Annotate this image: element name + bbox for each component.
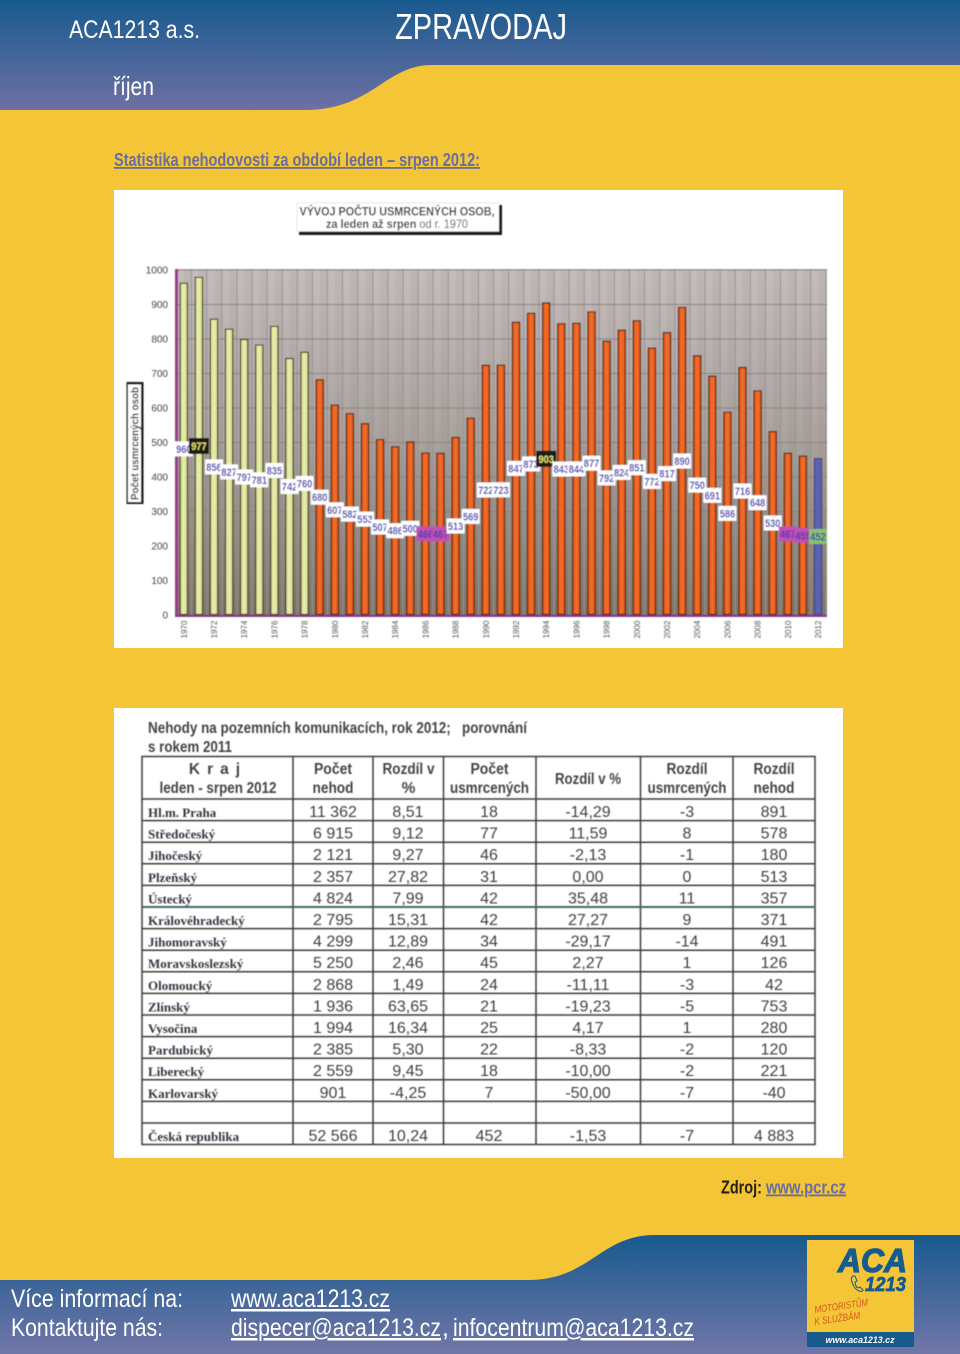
x-axis years: 1970 xyxy=(180,620,189,638)
logo: ACA 1213: 1213 xyxy=(865,1274,906,1296)
row: Středočeský: 77 xyxy=(480,826,498,843)
row: Královéhradecký: Královéhradecký xyxy=(148,913,245,928)
bar value labels: 760 xyxy=(297,479,313,491)
row: Olomoucký: -11,11 xyxy=(566,977,610,994)
row: Liberecký: 221 xyxy=(761,1063,787,1080)
row: Středočeský: 8 xyxy=(683,826,692,843)
bar value labels: 553 xyxy=(357,514,373,526)
row: Jihomoravský: Jihomoravský xyxy=(148,935,227,950)
bar value labels: 844 xyxy=(569,464,584,476)
x-axis years: 1984 xyxy=(391,620,400,638)
x-axis years: 1990 xyxy=(482,620,491,638)
row: Olomoucký: 1,49 xyxy=(392,977,424,994)
bar value labels: 468 xyxy=(418,529,433,541)
x-axis years: 2008 xyxy=(754,620,763,638)
row: Jihomoravský: 491 xyxy=(761,934,787,951)
x-axis years: 2010 xyxy=(784,620,793,638)
bar value labels: 530 xyxy=(765,518,781,530)
table grid xyxy=(142,756,815,1144)
row: Plzeňský xyxy=(148,869,787,886)
row: Česká republika total: -1,53 xyxy=(570,1128,606,1145)
row: Středočeský: 9,12 xyxy=(392,826,424,843)
table header row: Kraj xyxy=(189,761,247,778)
bar value labels: 851 xyxy=(629,463,645,475)
source credit: Zdroj: xyxy=(721,1178,762,1198)
y-axis scale: 300 xyxy=(151,507,168,518)
bar value labels: 873 xyxy=(523,459,539,471)
x-axis years: 1982 xyxy=(361,620,370,638)
row: Ústecký: 7,99 xyxy=(392,890,424,907)
row: Hl.m. Praha: -3 xyxy=(680,804,694,821)
row: Liberecký: Liberecký xyxy=(148,1064,205,1079)
chart title box xyxy=(297,203,502,235)
row: Karlovarský: 901 xyxy=(320,1085,346,1102)
row: Olomoucký: Olomoucký xyxy=(148,978,213,993)
plot area xyxy=(175,269,827,617)
row: Ústecký: 42 xyxy=(480,890,498,907)
row: Vysočina: 25 xyxy=(480,1020,498,1037)
row: Středočeský: 6 915 xyxy=(313,826,353,843)
row: Liberecký xyxy=(148,1063,787,1080)
x-axis years: 1998 xyxy=(603,620,612,638)
y-axis title box xyxy=(126,382,144,504)
row: Pardubický: 120 xyxy=(761,1042,787,1059)
row: Zlínský: 21 xyxy=(480,998,498,1015)
row: Jihočeský: Jihočeský xyxy=(148,848,203,863)
bar value labels: 742 xyxy=(282,482,298,494)
bar value labels: 723 xyxy=(493,485,509,497)
table title: Nehody na pozemních komunikacích, rok 2012; porovnání xyxy=(148,720,527,737)
table header row: Počet xyxy=(314,761,352,778)
row: Hl.m. Praha xyxy=(148,804,787,821)
row: Jihočeský: 2 121 xyxy=(313,847,353,864)
bar value labels: 586 xyxy=(720,509,735,521)
row: Jihočeský: 9,27 xyxy=(392,847,424,864)
row: Zlínský: -19,23 xyxy=(565,998,611,1015)
contact labels: Kontaktujte nás: xyxy=(11,1314,163,1342)
row: Středočeský xyxy=(148,826,787,843)
row: Olomoucký: 2 868 xyxy=(313,977,353,994)
bar value labels: 827 xyxy=(221,467,237,479)
row: Plzeňský: 0 xyxy=(683,869,692,886)
row: Jihočeský xyxy=(148,847,787,864)
logo: ACA 1213: ACA xyxy=(837,1242,907,1279)
row: Olomoucký: 42 xyxy=(765,977,783,994)
row: Zlínský: 753 xyxy=(761,998,787,1015)
table header row: Počet xyxy=(470,761,508,778)
row: Vysočina xyxy=(148,1020,787,1037)
table header row: usmrcených xyxy=(450,780,529,797)
row: Hl.m. Praha: 11 362 xyxy=(309,804,357,821)
bar value labels: 648 xyxy=(750,498,766,510)
x-axis years: 1992 xyxy=(512,620,521,638)
row: Ústecký: 4 824 xyxy=(313,890,353,907)
x-axis years: 2012 xyxy=(814,620,823,638)
row: Jihomoravský: 4 299 xyxy=(313,934,353,951)
contact links: www.aca1213.cz xyxy=(230,1285,390,1313)
row: Karlovarský: -50,00 xyxy=(565,1085,611,1102)
row: Pardubický: -2 xyxy=(680,1042,694,1059)
x-axis years: 1978 xyxy=(301,620,310,638)
row: Královéhradecký: 15,31 xyxy=(388,912,428,929)
table header row: Rozdíl v xyxy=(382,761,435,778)
row: Jihomoravský: 12,89 xyxy=(388,934,428,951)
row: Česká republika total: Česká republika xyxy=(148,1129,240,1144)
x-axis years: 1980 xyxy=(331,620,340,638)
x-axis years: 1976 xyxy=(270,620,279,638)
row: Královéhradecký xyxy=(148,912,787,929)
x-axis years xyxy=(180,620,823,638)
row: Moravskoslezský: 2,46 xyxy=(392,955,424,972)
row: Plzeňský: 2 357 xyxy=(313,869,353,886)
x-axis years: 1996 xyxy=(572,620,581,638)
month: říjen xyxy=(113,71,154,101)
y-axis scale: 900 xyxy=(151,300,168,311)
bar value labels: 607 xyxy=(327,505,343,517)
logo: ACA 1213: K SLUŽBÁM xyxy=(814,1309,862,1328)
row: Zlínský: 63,65 xyxy=(388,998,428,1015)
bar value labels: 467 xyxy=(780,529,796,541)
bar value labels: 843 xyxy=(554,464,569,476)
y-axis scale: 800 xyxy=(151,334,168,346)
y-axis scale xyxy=(146,266,168,622)
row: Plzeňský: 27,82 xyxy=(388,869,428,886)
row: Moravskoslezský: 2,27 xyxy=(572,955,604,972)
y-axis title box: Počet usmrcených osob xyxy=(130,387,142,500)
row: Jihomoravský: -29,17 xyxy=(565,934,611,951)
x-axis years: 2000 xyxy=(633,620,642,638)
row: Jihočeský: 180 xyxy=(761,847,787,864)
bar value labels: 797 xyxy=(237,472,252,484)
y-axis scale: 0 xyxy=(162,610,168,622)
row: Ústecký: 357 xyxy=(761,890,787,907)
bar value labels: 722 xyxy=(478,485,494,497)
row: Vysočina: 1 xyxy=(683,1020,692,1037)
row: Jihočeský: 46 xyxy=(480,847,498,864)
row: Zlínský: -5 xyxy=(680,998,694,1015)
row: Karlovarský: -4,25 xyxy=(390,1085,426,1102)
row: Karlovarský xyxy=(148,1085,786,1102)
row: Pardubický: Pardubický xyxy=(148,1043,214,1058)
row: Ústecký: 11 xyxy=(679,890,695,907)
row: Plzeňský: 31 xyxy=(480,869,498,886)
row: Královéhradecký: 42 xyxy=(480,912,498,929)
row: Pardubický: 5,30 xyxy=(392,1042,424,1059)
table header row: Rozdíl v % xyxy=(555,771,621,788)
bar value labels: 835 xyxy=(267,466,282,478)
logo: ACA 1213 xyxy=(807,1240,914,1347)
row: Ústecký: Ústecký xyxy=(148,891,193,906)
bar value labels: 486 xyxy=(388,526,403,538)
table header row xyxy=(160,761,794,797)
contact labels xyxy=(11,1285,183,1342)
bar value labels: 459 xyxy=(795,531,811,543)
contact links: , xyxy=(442,1314,449,1342)
row: Česká republika total xyxy=(148,1128,794,1145)
row: Hl.m. Praha: 8,51 xyxy=(392,804,424,821)
x-axis years: 1994 xyxy=(542,620,551,638)
table header row: Rozdíl xyxy=(666,761,708,778)
bar value labels: 977 xyxy=(191,441,207,453)
table header row: Rozdíl xyxy=(754,761,794,778)
organisation name: ACA1213 a.s. xyxy=(69,16,200,44)
bar value labels: 750 xyxy=(690,480,705,492)
row: Hl.m. Praha: 18 xyxy=(480,804,498,821)
table header row: leden - srpen 2012 xyxy=(160,780,276,797)
y-axis scale: 400 xyxy=(151,472,168,484)
x-axis years: 2004 xyxy=(693,620,702,638)
bars 1970-2012 xyxy=(180,277,822,614)
icon: phone xyxy=(851,1276,863,1291)
y-axis scale: 100 xyxy=(151,576,168,587)
row: Olomoucký: -3 xyxy=(680,977,694,994)
row: Karlovarský: Karlovarský xyxy=(148,1086,219,1101)
bar value labels: 467 xyxy=(433,529,449,541)
bar value labels: 877 xyxy=(584,459,600,470)
logo: ACA 1213: MOTORISTŮM xyxy=(813,1295,869,1316)
y-axis scale: 600 xyxy=(151,404,168,414)
y-axis scale: 700 xyxy=(151,369,168,380)
row: Středočeský: 578 xyxy=(761,826,787,843)
bar value labels: 691 xyxy=(705,491,720,503)
bar value labels: 824 xyxy=(614,468,630,480)
contact links: infocentrum@aca1213.cz xyxy=(453,1314,694,1342)
table header row: nehod xyxy=(312,780,354,797)
bar value labels: 507 xyxy=(372,522,388,534)
row: Zlínský: Zlínský xyxy=(148,999,190,1014)
bar value labels: 890 xyxy=(674,456,690,468)
bar value labels: 582 xyxy=(342,509,358,521)
bar value labels: 569 xyxy=(463,512,479,524)
row: Pardubický: 2 385 xyxy=(313,1042,353,1059)
panel: accidents table xyxy=(114,708,843,1158)
row: Liberecký: 2 559 xyxy=(313,1063,353,1080)
y-axis scale: 200 xyxy=(151,542,168,552)
row: Česká republika total: 52 566 xyxy=(309,1128,358,1145)
row: Liberecký: 18 xyxy=(480,1063,498,1080)
row: Pardubický: 22 xyxy=(480,1042,498,1059)
row: Plzeňský: Plzeňský xyxy=(148,870,198,885)
chart title box: VÝVOJ POČTU USMRCENÝCH OSOB, xyxy=(300,204,494,218)
newsletter title: ZPRAVODAJ xyxy=(395,6,567,47)
row: Vysočina: 16,34 xyxy=(388,1020,428,1037)
row: Vysočina: 4,17 xyxy=(572,1020,604,1037)
row: Pardubický xyxy=(148,1042,787,1059)
table title: s rokem 2011 xyxy=(148,739,232,756)
contact links xyxy=(230,1285,694,1342)
section heading: Statistika nehodovosti za období leden – srpen 2012: xyxy=(114,150,480,170)
row: Moravskoslezský: 126 xyxy=(761,955,787,972)
row: Jihomoravský: 34 xyxy=(480,934,498,951)
row: Vysočina: 280 xyxy=(761,1020,787,1037)
x-axis years: 1974 xyxy=(240,620,249,638)
table header row: % xyxy=(402,780,416,797)
bar value labels: 781 xyxy=(252,475,267,487)
bar value labels: 716 xyxy=(735,486,751,498)
x-axis years: 1986 xyxy=(421,620,430,638)
bar value labels: 772 xyxy=(644,477,660,489)
bar value labels: 960 xyxy=(176,444,192,456)
row: Česká republika total: -7 xyxy=(680,1128,694,1145)
bar value labels: 792 xyxy=(599,473,615,485)
row: Zlínský xyxy=(148,998,787,1015)
row: Vysočina: 1 994 xyxy=(313,1020,353,1037)
row: Česká republika total: 4 883 xyxy=(754,1128,794,1145)
bar value labels: 513 xyxy=(448,521,464,533)
row: Hl.m. Praha: 891 xyxy=(761,804,787,821)
row: Olomoucký xyxy=(148,977,783,994)
row: Jihomoravský xyxy=(148,934,787,951)
bar value labels: 452 xyxy=(810,532,826,544)
row: Česká republika total: 10,24 xyxy=(388,1128,428,1145)
table header row: usmrcených xyxy=(648,780,726,797)
chart title box: za leden až srpen od r. 1970 xyxy=(326,217,468,231)
row: Královéhradecký: 27,27 xyxy=(568,912,608,929)
bar value labels: 903 xyxy=(539,454,554,466)
row: Ústecký: 35,48 xyxy=(568,890,608,907)
x-axis years: 2002 xyxy=(663,620,672,638)
row: Olomoucký: 24 xyxy=(480,977,498,994)
row: Moravskoslezský: 5 250 xyxy=(313,955,353,972)
row: Moravskoslezský: 45 xyxy=(480,955,498,972)
row: Pardubický: -8,33 xyxy=(570,1042,606,1059)
row: Moravskoslezský: Moravskoslezský xyxy=(148,956,244,971)
table title xyxy=(148,720,527,756)
x-axis years: 2006 xyxy=(723,620,732,638)
x-axis years: 1972 xyxy=(210,620,219,638)
row: Jihočeský: -2,13 xyxy=(570,847,606,864)
source credit xyxy=(721,1178,846,1198)
row: Moravskoslezský xyxy=(148,955,787,972)
row: Karlovarský: -7 xyxy=(680,1085,694,1102)
row: Hl.m. Praha: Hl.m. Praha xyxy=(148,805,217,820)
bar value labels: 817 xyxy=(659,469,675,481)
row: Liberecký: 9,45 xyxy=(392,1063,424,1080)
row: Středočeský: Středočeský xyxy=(148,827,216,842)
row: Liberecký: -2 xyxy=(680,1063,694,1080)
row: Královéhradecký: 9 xyxy=(683,912,692,929)
table header row: nehod xyxy=(754,780,794,797)
row: Zlínský: 1 936 xyxy=(313,998,353,1015)
panel: fatalities bar chart xyxy=(114,190,843,648)
row: Plzeňský: 513 xyxy=(761,869,787,886)
row: Liberecký: -10,00 xyxy=(565,1063,611,1080)
row: Vysočina: Vysočina xyxy=(148,1021,198,1036)
y-axis scale: 1000 xyxy=(146,266,168,276)
contact links: dispecer@aca1213.cz xyxy=(231,1314,441,1342)
bar value labels: 500 xyxy=(403,524,418,536)
footer band xyxy=(0,1235,960,1354)
row: Královéhradecký: 2 795 xyxy=(313,912,353,929)
row: Moravskoslezský: 1 xyxy=(683,955,692,972)
row: Karlovarský: 7 xyxy=(485,1085,494,1102)
header band xyxy=(0,0,960,110)
row: Karlovarský: -40 xyxy=(762,1085,786,1102)
row: Česká republika total: 452 xyxy=(476,1128,502,1145)
bar value labels: 847 xyxy=(508,464,524,476)
bar value labels: 856 xyxy=(206,462,222,474)
x-axis years: 1988 xyxy=(452,620,461,638)
contact labels: Více informací na: xyxy=(11,1285,183,1313)
row: Jihomoravský: -14 xyxy=(675,934,699,951)
row: Jihočeský: -1 xyxy=(680,847,694,864)
row: Královéhradecký: 371 xyxy=(761,912,787,929)
y-axis scale: 500 xyxy=(151,438,168,449)
row: Ústecký xyxy=(148,890,787,907)
row: Plzeňský: 0,00 xyxy=(572,869,604,886)
bar value labels: 680 xyxy=(312,493,328,504)
row: Hl.m. Praha: -14,29 xyxy=(565,804,611,821)
logo: ACA 1213: www.aca1213.cz xyxy=(826,1335,895,1346)
row: Středočeský: 11,59 xyxy=(569,826,608,843)
source credit: www.pcr.cz xyxy=(765,1178,846,1198)
bar value labels xyxy=(175,438,827,544)
